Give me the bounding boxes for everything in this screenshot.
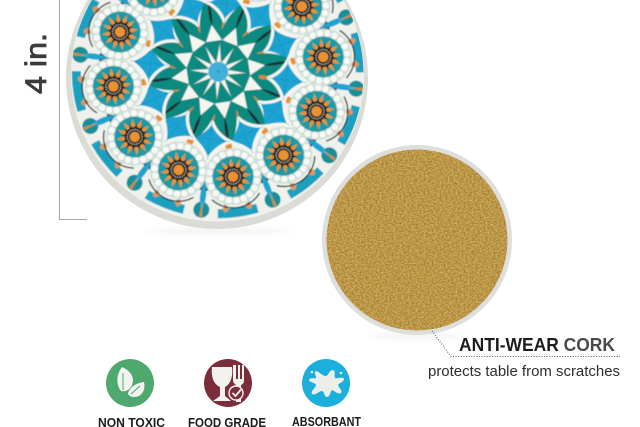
dimension bracket: [60, 0, 87, 220]
dimension label: 4 in.: 4 in.: [20, 33, 53, 94]
callout heading: ANTI-WEAR CORK: [459, 334, 616, 355]
coaster: cork back: [322, 145, 512, 338]
white triangles around the star: [243, 76, 263, 92]
rosettes: [288, 83, 350, 142]
central blue medallion: [208, 62, 228, 82]
icon: non toxic leaves: [106, 359, 154, 407]
white star spikes: [189, 42, 248, 101]
icon: absorbant splash: [302, 359, 350, 407]
coaster: mandala front: [66, 0, 368, 234]
icon: food grade glass and fork: [204, 359, 252, 407]
callout subtext: protects table from scratches: [428, 363, 620, 380]
mandala artwork: [72, 0, 364, 220]
central teal star: [187, 41, 249, 103]
callout leader line: [432, 331, 620, 356]
